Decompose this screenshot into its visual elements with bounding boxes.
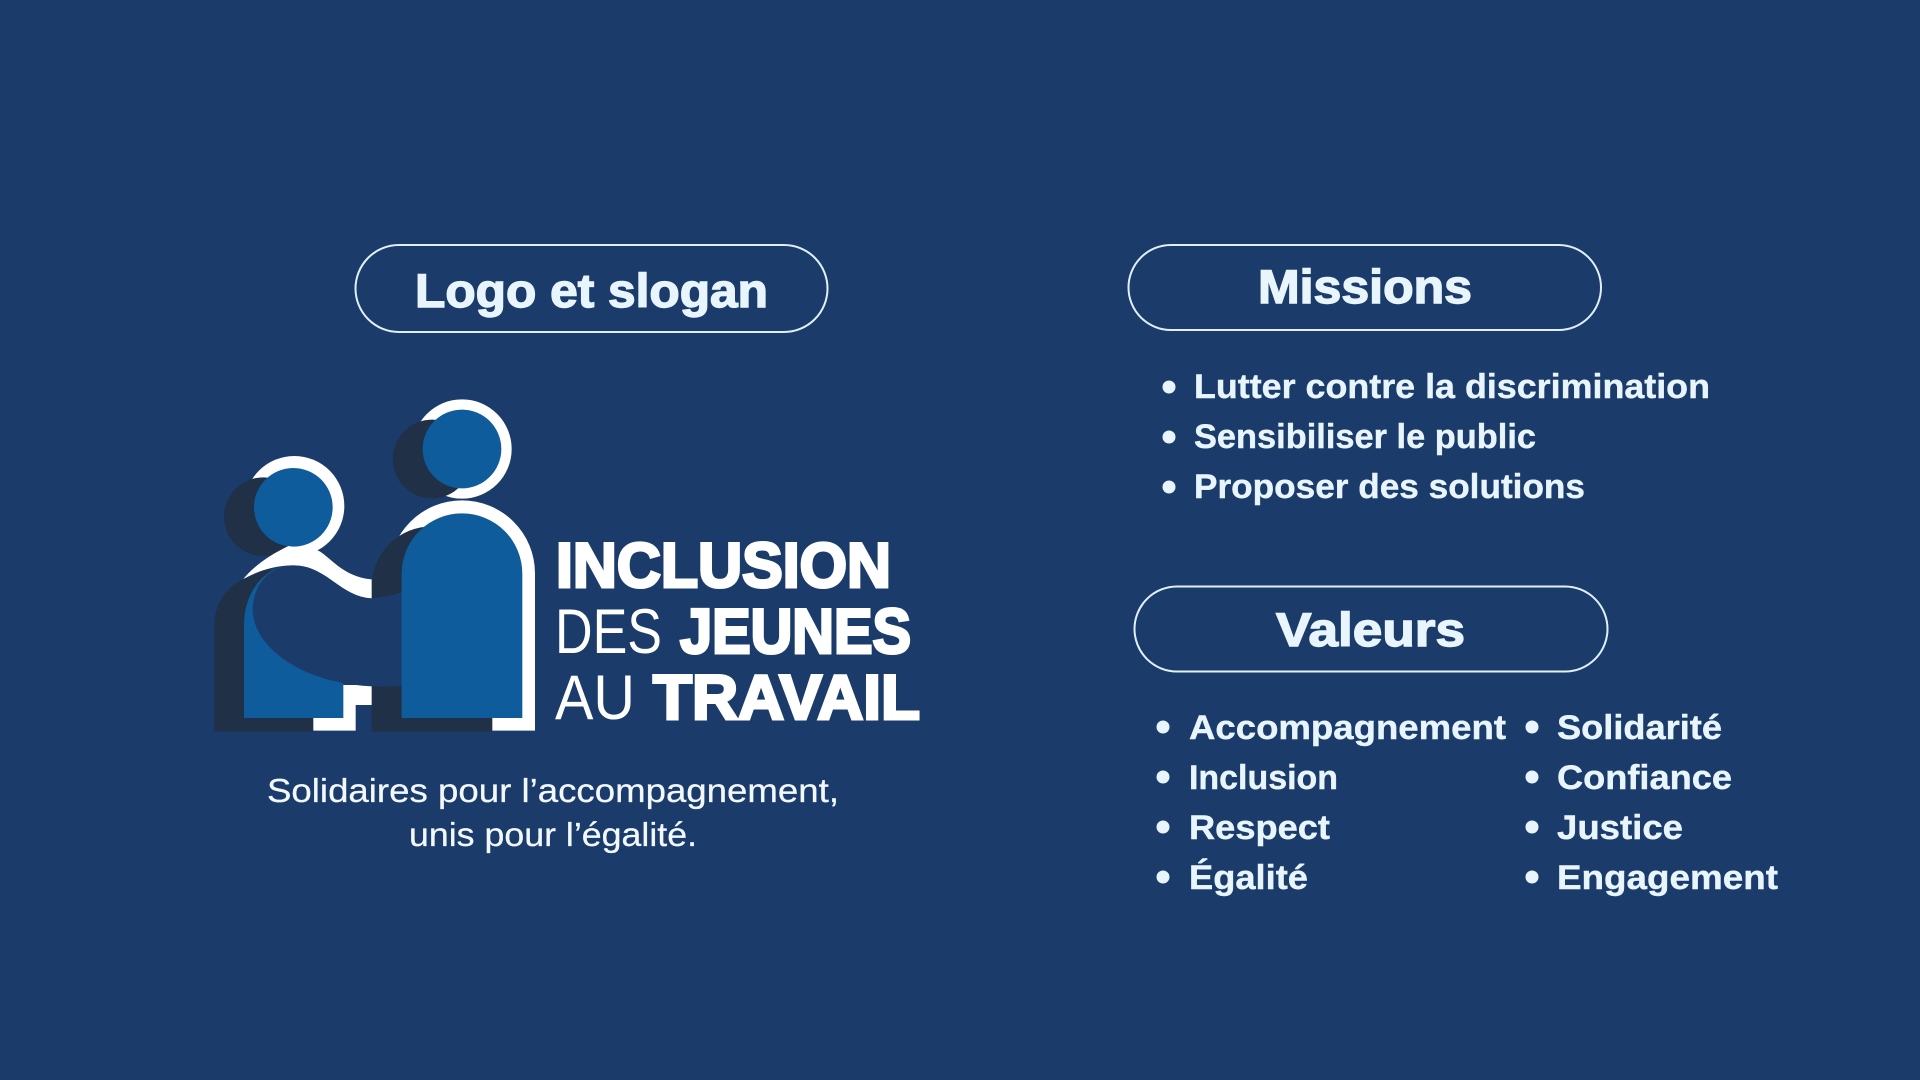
panel: valeurs: [1134, 586, 1778, 897]
list: missions: Lutter contre la discrimination: [1194, 368, 1710, 406]
heading pill: Valeurs: Valeurs: [1276, 603, 1465, 656]
slogan: [267, 772, 839, 853]
list: valeurs right column: [1526, 709, 1778, 897]
icon: right person body: [402, 513, 522, 718]
heading pill: Valeurs: [1134, 586, 1608, 672]
list: valeurs left column: Respect: [1189, 809, 1330, 847]
heading pill: Missions: [1128, 245, 1601, 330]
icon: right person shadow and outline: [372, 399, 535, 732]
heading pill: Missions: Missions: [1258, 260, 1472, 313]
list: valeurs left column: Inclusion: [1189, 759, 1338, 797]
logo wordmark: JEUNES: [680, 597, 911, 667]
list: valeurs right column: Confiance: [1557, 759, 1732, 797]
icon: left person: [214, 456, 372, 732]
list: missions: Sensibiliser le public: [1194, 418, 1536, 456]
logo wordmark: DES: [555, 597, 662, 667]
heading pill: Logo et slogan: [356, 245, 828, 332]
list: valeurs left column: [1156, 709, 1506, 897]
list: missions: Proposer des solutions: [1194, 468, 1585, 506]
slogan: Solidaires pour l’accompagnement,: [267, 772, 839, 809]
logo wordmark: AU: [555, 663, 635, 733]
logo wordmark: [555, 531, 920, 733]
list: missions: [1162, 368, 1710, 506]
list: valeurs right column: Justice: [1557, 809, 1683, 847]
list: valeurs right column: Engagement: [1557, 859, 1778, 897]
icon: arm on shoulder: [253, 565, 413, 687]
logo wordmark: TRAVAIL: [653, 663, 920, 733]
list: valeurs left column: Accompagnement: [1189, 709, 1506, 747]
list: valeurs right column: Solidarité: [1557, 709, 1722, 747]
panel: logo et slogan: [214, 245, 920, 853]
logo wordmark: INCLUSION: [556, 531, 891, 601]
list: valeurs left column: Égalité: [1189, 859, 1308, 897]
slogan: unis pour l’égalité.: [409, 816, 697, 853]
icon: logo two people: [214, 399, 535, 732]
heading pill: Logo et slogan: Logo et slogan: [415, 264, 768, 317]
panel: missions: [1128, 245, 1710, 506]
